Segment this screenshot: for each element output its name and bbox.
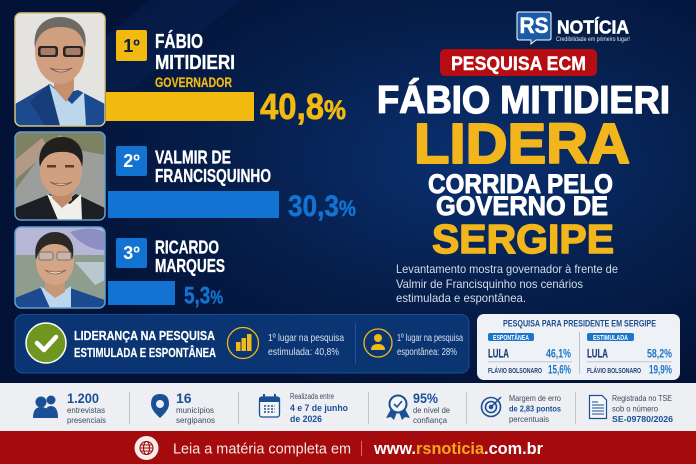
- photo: Valmir de Francisquinho: [15, 132, 105, 220]
- stat: margem de erro: de 2,83 pontos: [509, 404, 561, 414]
- stat: estimulada: [268, 332, 344, 358]
- logo: RS Notícia: NOTÍCIA: [557, 16, 629, 38]
- value 2: 30,3%: [288, 190, 356, 223]
- role: GOVERNADOR: [155, 75, 232, 90]
- panel heading: LIDERANÇA NA PESQUISA: [74, 328, 216, 343]
- value 3: 5,3%: [184, 282, 223, 310]
- value 1: 40,8%: [260, 86, 346, 127]
- stat: confiança: confiança: [413, 415, 447, 425]
- stat: estimulada: estimulada: 40,8%: [268, 346, 339, 358]
- photo: Ricardo Marques: [15, 227, 105, 308]
- column: espontânea: 15,6%: [548, 362, 571, 376]
- stat: margem de erro: Margem de erro: [509, 394, 561, 403]
- stat: confiança: 95%: [413, 390, 438, 406]
- column: estimulada: 58,2%: [647, 346, 672, 360]
- stat: estimulada: 1º lugar na pesquisa: [268, 332, 344, 344]
- stat: entrevistas: 1.200: [67, 390, 99, 406]
- bar 2: [108, 191, 279, 218]
- stat: espontânea: [397, 333, 463, 358]
- panel: liderança: [15, 314, 469, 373]
- icon: bars: [228, 328, 258, 358]
- icon: pin: [151, 394, 169, 418]
- logo: RS Notícia: [517, 12, 630, 44]
- rank badge 2: [116, 146, 147, 176]
- icon: check: [26, 323, 66, 363]
- icon: people: [33, 396, 58, 418]
- name 3: RICARDO: [155, 238, 219, 258]
- icon: ribbon badge: [386, 396, 410, 420]
- column: espontânea: FLÁVIO BOLSONARO: [488, 366, 542, 375]
- photo frame 2: [15, 132, 105, 220]
- name 1: FÁBIO: [155, 30, 203, 53]
- column: espontânea: 46,1%: [546, 346, 571, 360]
- stat: entrevistas: entrevistas: [67, 405, 105, 415]
- footer stats band: [0, 383, 696, 431]
- name 1: MITIDIERI: [155, 52, 235, 74]
- stat: municípios: sergipanos: [176, 415, 215, 425]
- panel heading: [74, 328, 216, 360]
- stat: margem de erro: [482, 394, 561, 424]
- name 2: [155, 148, 271, 186]
- icon: calendar: [260, 394, 280, 417]
- photo: Fábio Mitidieri: [15, 13, 105, 126]
- photo frame 1: [15, 13, 105, 126]
- panel: presidente: [477, 314, 680, 380]
- icon: target: [482, 397, 501, 416]
- stat: entrevistas: presenciais: [67, 415, 106, 425]
- stat: municípios: [151, 390, 215, 425]
- stat: registro TSE: [590, 394, 673, 424]
- stat: registro TSE: SE-09780/2026: [612, 414, 673, 424]
- call to action text: Leia a matéria completa em: [173, 440, 351, 458]
- candidate 1: [106, 30, 346, 127]
- stat: entrevistas: [33, 390, 106, 425]
- stat: confiança: de nível de: [413, 405, 450, 415]
- logo: RS Notícia: Credibilidade em primeiro lugar!: [556, 37, 630, 43]
- stat: registro TSE: Registrada no TSE: [612, 394, 672, 403]
- name 1: [155, 30, 235, 74]
- stat: período: 4 e 7 de junho: [290, 403, 348, 414]
- description: Valmir de Francisquinho nos cenários: [396, 277, 583, 291]
- column: estimulada: LULA: [587, 346, 608, 360]
- column: estimulada: FLÁVIO BOLSONARO: [587, 366, 641, 375]
- stat: confiança: [386, 390, 450, 425]
- stat: municípios: municípios: [176, 405, 214, 415]
- stat: registro TSE: sob o número: [612, 404, 659, 414]
- description: Levantamento mostra governador à frente de: [396, 262, 618, 276]
- description: estimulada e espontânea.: [396, 291, 526, 305]
- tag: Pesquisa ECM: PESQUISA ECM: [451, 53, 586, 75]
- stat: espontânea: 1º lugar na pesquisa: [397, 333, 463, 344]
- headline: FÁBIO MITIDIERI: [377, 78, 670, 122]
- headline: LIDERA: [414, 112, 630, 176]
- rank badge 1: 1º: [123, 36, 140, 56]
- icon: globe: [134, 436, 158, 460]
- headline: [377, 78, 670, 262]
- name 2: VALMIR DE: [155, 148, 231, 168]
- column: espontânea: [488, 333, 572, 376]
- stat: período: [260, 392, 348, 425]
- candidate 3: [108, 238, 225, 310]
- name 2: FRANCISQUINHO: [155, 166, 271, 186]
- stat: margem de erro: percentuais: [509, 415, 549, 424]
- stat: período: Realizada entre: [290, 392, 334, 401]
- stat: período: de 2026: [290, 414, 322, 425]
- name 3: MARQUES: [155, 256, 225, 276]
- logo: RS Notícia: RS: [520, 13, 548, 38]
- url: www.rsnoticia.com.br: [373, 440, 544, 458]
- column: espontânea: ESPONTÂNEA: [493, 333, 529, 342]
- name 3: [155, 238, 225, 276]
- icon: person: [364, 329, 392, 357]
- stat: espontânea: espontânea: 28%: [397, 347, 457, 358]
- headline: CORRIDA PELO: [428, 169, 613, 199]
- column: espontânea: LULA: [488, 346, 509, 360]
- column: estimulada: 19,9%: [649, 362, 672, 376]
- column: estimulada: [587, 333, 672, 376]
- stat: municípios: 16: [176, 390, 192, 406]
- icon: document: [590, 396, 606, 418]
- description: [396, 262, 618, 305]
- rank badge 1: [116, 30, 147, 61]
- footer call to action: [0, 431, 696, 464]
- column: estimulada: ESTIMULADA: [593, 335, 628, 342]
- headline: SERGIPE: [432, 216, 614, 262]
- bar 3: [108, 281, 175, 305]
- rank badge 2: 2º: [123, 151, 140, 171]
- bar 1: [106, 92, 254, 121]
- panel heading: ESTIMULADA E ESPONTÂNEA: [74, 345, 216, 360]
- headline: GOVERNO DE: [436, 191, 608, 221]
- rank badge 3: 3º: [123, 243, 140, 263]
- photo frame 3: [15, 227, 105, 308]
- candidate 2: [108, 146, 356, 223]
